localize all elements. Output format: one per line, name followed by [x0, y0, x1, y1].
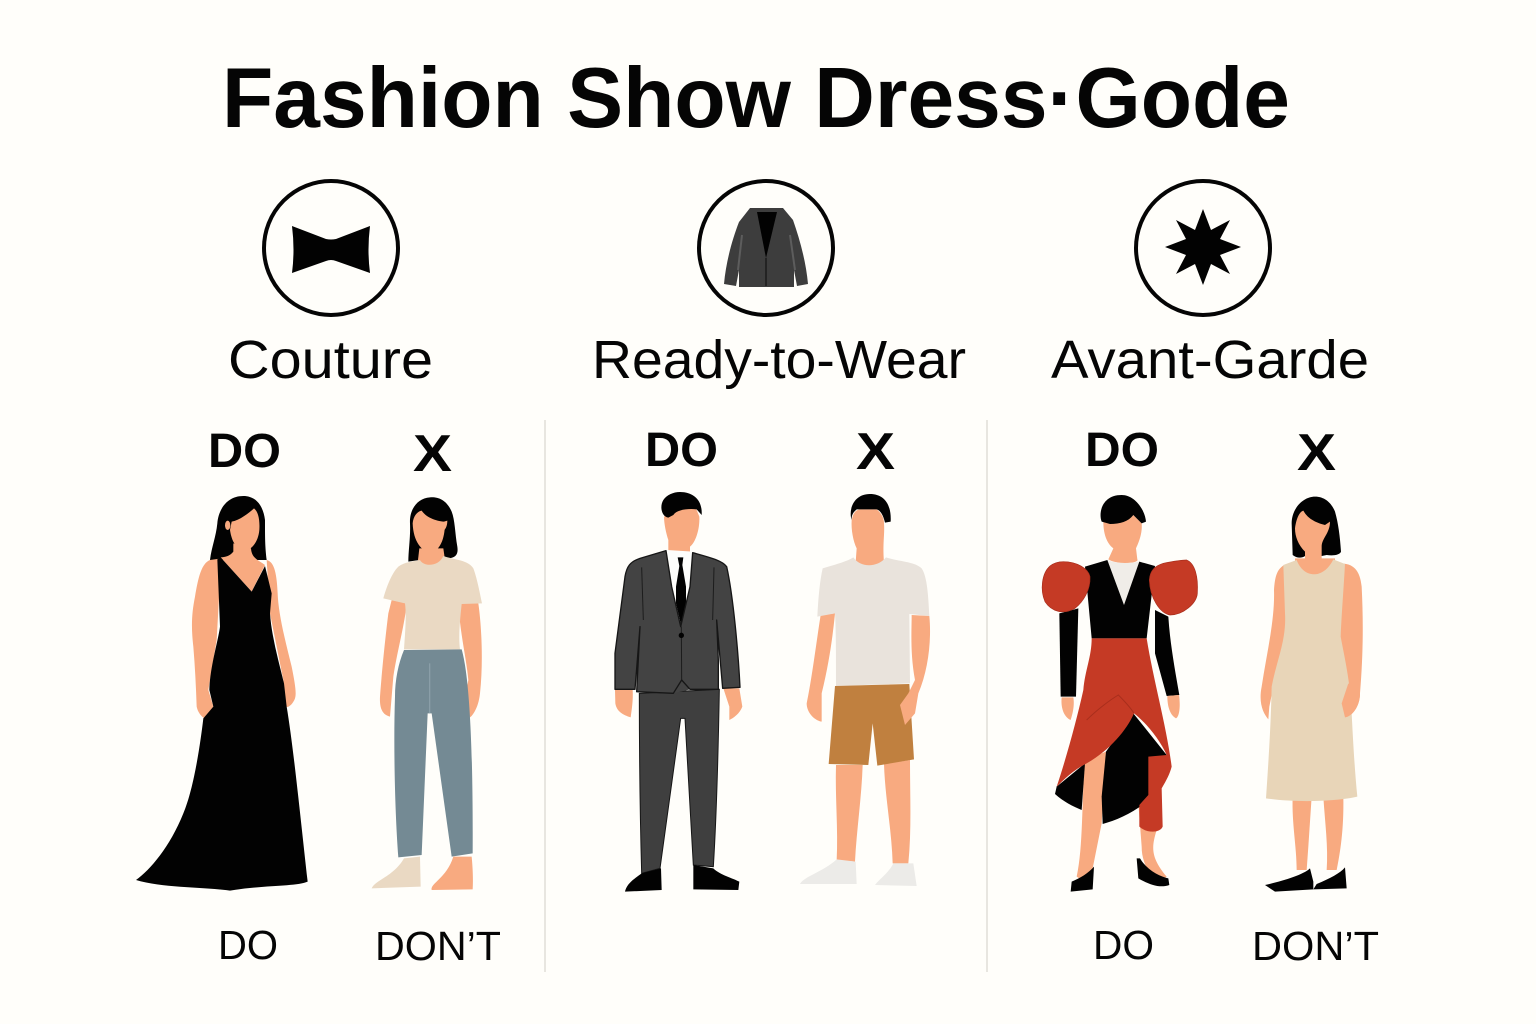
- label: don't caption: DON’T: [1252, 923, 1379, 969]
- panel: ready-to-wear: [592, 181, 966, 892]
- label: x: X: [1297, 424, 1336, 482]
- figure: red puff-sleeve outfit: [1042, 495, 1198, 892]
- heading: avant-garde: Avant-Garde: [1051, 330, 1369, 390]
- figure: dark suit: [615, 492, 742, 892]
- label: don't caption: DON’T: [375, 923, 501, 969]
- label: do caption: DO: [1093, 922, 1154, 968]
- panel: avant-garde: [1042, 181, 1379, 969]
- icon: eight-point star: [1136, 181, 1270, 315]
- panel: couture: [136, 181, 501, 969]
- icon: bow tie: [264, 181, 398, 315]
- figure: black gown: [136, 496, 308, 891]
- label: do caption: DO: [218, 922, 278, 968]
- label: x: X: [413, 425, 452, 483]
- label: do: DO: [645, 424, 718, 477]
- figure: tee and shorts: [800, 494, 930, 886]
- heading: couture: Couture: [228, 330, 433, 390]
- icon: jacket: [699, 181, 833, 315]
- figure: tee and jeans: [372, 497, 482, 890]
- figure: beige shift dress: [1261, 497, 1363, 892]
- label: do: DO: [208, 425, 281, 478]
- label: do: DO: [1085, 424, 1159, 477]
- heading: ready-to-wear: Ready-to-Wear: [592, 330, 966, 390]
- label: x: X: [856, 423, 895, 481]
- title: Fashion Show Dress·Gode: [222, 51, 1290, 146]
